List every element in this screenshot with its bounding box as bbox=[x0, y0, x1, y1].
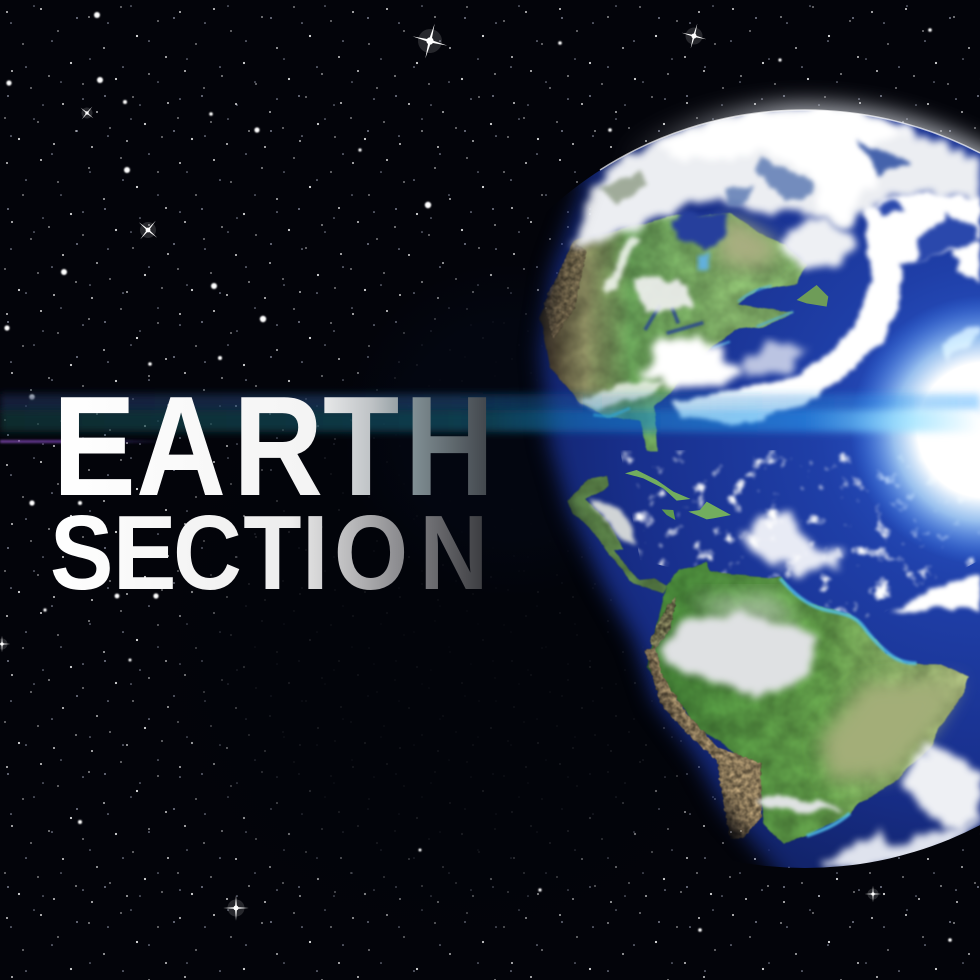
limb highlight bbox=[600, 110, 980, 170]
title bbox=[50, 368, 495, 612]
rocky mountains bbox=[543, 243, 587, 340]
plains cloud bbox=[577, 380, 667, 408]
amazon cloud bbox=[660, 613, 817, 698]
northwest atlantic patch bbox=[858, 142, 910, 175]
gulf of mexico coast bbox=[593, 408, 630, 417]
newfoundland bbox=[797, 285, 828, 307]
atlantic cloud wisps bbox=[737, 343, 807, 377]
great lakes cloud bbox=[633, 277, 693, 313]
arctic archipelago bbox=[727, 158, 813, 207]
canadian arctic land under cloud bbox=[597, 172, 647, 203]
cuba bbox=[625, 470, 691, 501]
ocean bbox=[528, 110, 980, 868]
central america bbox=[568, 477, 668, 593]
hudson bay bbox=[672, 212, 727, 250]
caribbean cloud bbox=[743, 513, 843, 573]
great lakes bbox=[645, 305, 703, 333]
atmosphere glow above the globe bbox=[631, 86, 980, 153]
open water in front bbox=[877, 200, 977, 263]
bottom swirl bbox=[820, 820, 980, 869]
storm swirl bbox=[782, 218, 852, 268]
northern south america haze bbox=[690, 593, 800, 623]
gulf and coast shallows bbox=[712, 286, 793, 348]
scattered tropical clouds bbox=[620, 450, 980, 618]
northern clouds bbox=[573, 107, 980, 425]
amazon delta shallows bbox=[780, 578, 917, 836]
polar cloud cap bbox=[573, 107, 980, 248]
sun glare bbox=[850, 295, 980, 565]
cloud streak bbox=[605, 237, 637, 292]
james bay bbox=[698, 253, 710, 272]
atlantic front bbox=[673, 193, 980, 425]
central america cloud bbox=[587, 497, 638, 542]
east coast cloud bbox=[643, 333, 743, 390]
tan interior of quebec bbox=[717, 215, 780, 267]
south america land bbox=[647, 562, 970, 843]
south atlantic cloud bbox=[900, 743, 980, 833]
brazilian highlands bbox=[820, 682, 960, 780]
north america bbox=[540, 212, 828, 450]
atlantic cloud band bbox=[890, 573, 980, 613]
title line: earth: EARTH bbox=[53, 368, 495, 526]
lens flare streak bbox=[0, 394, 980, 432]
northern andes bbox=[650, 597, 677, 650]
central and south america bbox=[568, 470, 970, 843]
title line: section: SECTION bbox=[50, 494, 488, 612]
patagonia cloud bbox=[753, 793, 843, 812]
hispaniola bbox=[688, 502, 731, 519]
arctic cloud cover bbox=[660, 110, 920, 225]
andes bbox=[645, 647, 762, 838]
far right cloud bbox=[953, 243, 980, 283]
jamaica bbox=[662, 509, 675, 520]
magenta flare line bbox=[0, 440, 170, 443]
earth globe bbox=[528, 109, 980, 868]
southern clouds bbox=[587, 497, 980, 869]
